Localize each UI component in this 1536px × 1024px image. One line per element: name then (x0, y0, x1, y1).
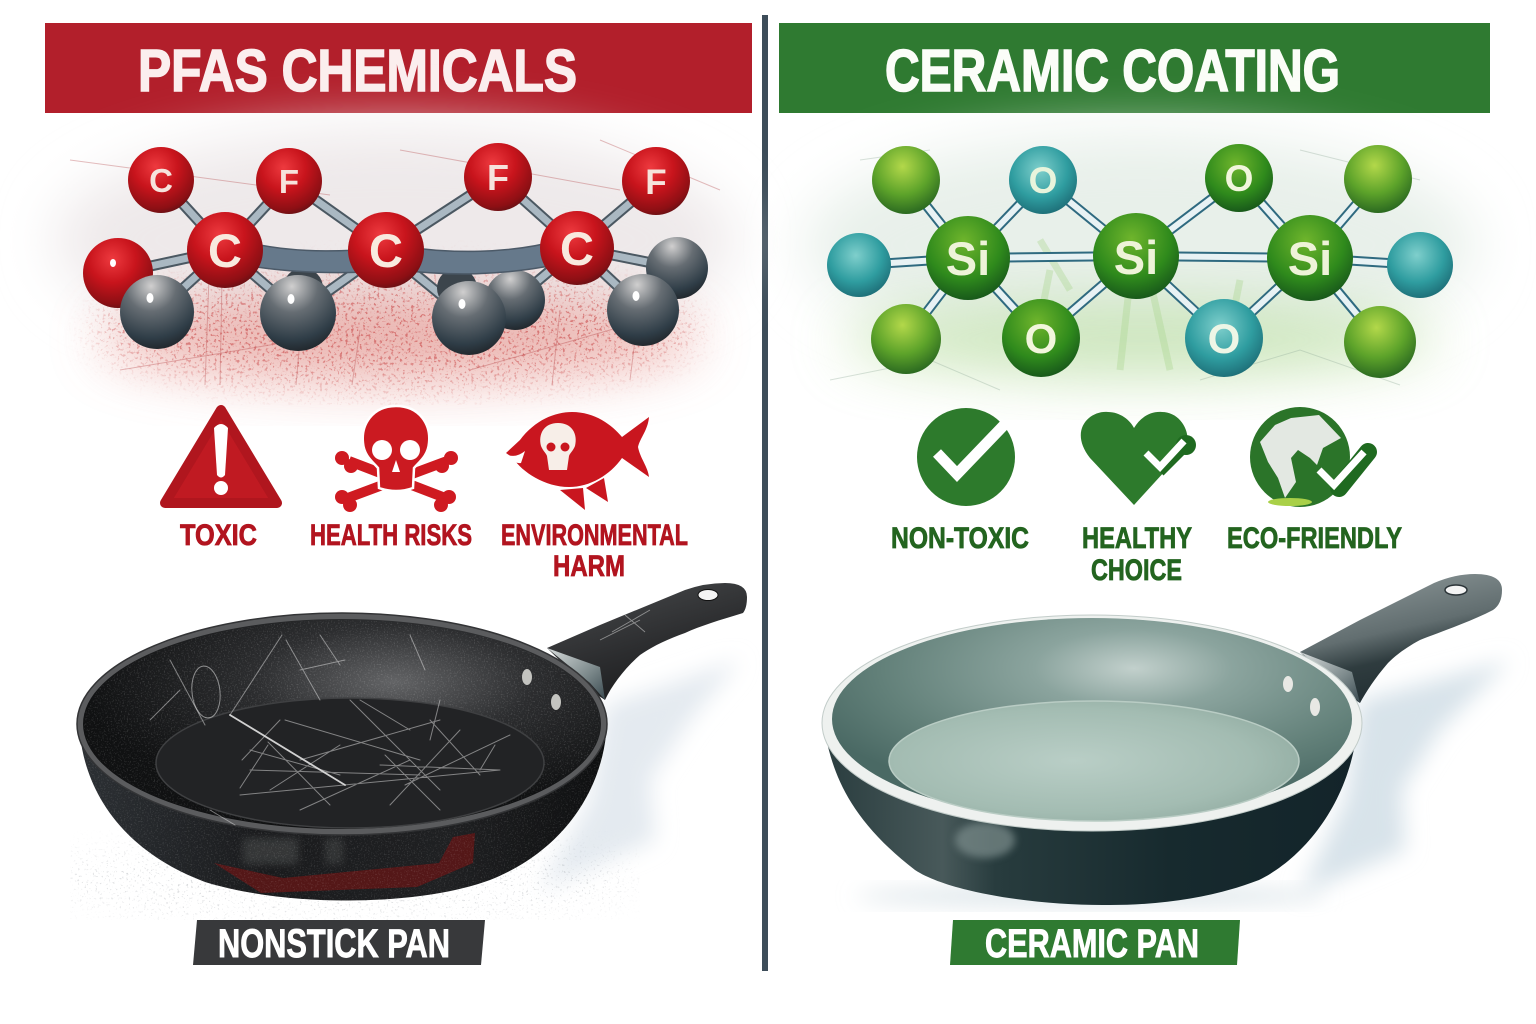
atom: O teal (1185, 299, 1263, 377)
atom: Si left (926, 216, 1010, 300)
pan floor (156, 698, 544, 828)
pan interior (83, 619, 601, 829)
atom: O teal: O (1208, 315, 1240, 362)
label: environmental harm (501, 519, 688, 583)
atoms behind chain (283, 237, 708, 330)
atom: C centre left: C (208, 224, 242, 277)
atom: O green: O (1025, 315, 1057, 362)
pan shadow (540, 660, 740, 890)
icon: heart with check (1081, 412, 1196, 505)
heading: PFAS chemicals (45, 23, 752, 113)
atom: lime (871, 304, 941, 374)
label: environmental harm: ENVIRONMENTAL (501, 519, 688, 552)
atom: grey (120, 275, 194, 349)
atom: grey (607, 274, 679, 346)
label: healthy choice: HEALTHY (1082, 522, 1192, 555)
atom: F (464, 143, 532, 211)
pan: scratched nonstick (70, 583, 747, 920)
atom: F: F (645, 163, 667, 202)
icon: warning triangle (165, 410, 277, 503)
icon: check circle (917, 408, 1015, 506)
atom: C (128, 147, 194, 213)
label: healthy choice: CHOICE (1091, 554, 1182, 587)
icon: globe with check (1250, 407, 1368, 507)
pan shadow (1300, 660, 1510, 895)
icon: skull and crossbones (335, 406, 458, 512)
icon: fish with skull (506, 412, 649, 510)
pan body gloss (955, 822, 1015, 858)
divider (762, 15, 768, 971)
heading: PFAS chemicals: PFAS CHEMICALS (138, 38, 577, 104)
label: non-toxic: NON-TOXIC (891, 522, 1029, 555)
bonds (118, 177, 677, 318)
bonds (859, 178, 1420, 342)
atom: O teal: O (1029, 160, 1057, 201)
atom: grey (260, 275, 336, 351)
atom: lime (872, 146, 940, 214)
atom: Si centre (1093, 213, 1179, 299)
label: ceramic pan: CERAMIC PAN (985, 922, 1199, 966)
backbone band (250, 240, 560, 274)
atom: C centre: C (369, 224, 403, 277)
atom: grey (432, 281, 506, 355)
atom: Si right: Si (1288, 232, 1332, 285)
pan rim (77, 613, 607, 835)
atom: O green (1205, 144, 1273, 212)
label: eco-friendly: ECO-FRIENDLY (1227, 522, 1402, 555)
atom: O green (1002, 299, 1080, 377)
pan body (80, 735, 606, 901)
label: health risks: HEALTH RISKS (310, 519, 472, 552)
atom: left red (83, 238, 153, 308)
molecule backdrop: red stain (55, 130, 740, 405)
pan interior texture (80, 615, 605, 830)
atom: F (256, 148, 322, 214)
atom: F (622, 147, 690, 215)
panel: ceramic coating (779, 23, 1510, 966)
molecule: PFAS chain (83, 143, 708, 355)
atom: O green: O (1225, 158, 1253, 199)
label: toxic: TOXIC (180, 519, 257, 552)
pan interior (832, 618, 1352, 820)
atom: teal left (827, 233, 891, 297)
atom: Si left: Si (946, 232, 990, 285)
atom: C centre right (540, 211, 614, 285)
atom: C centre left (187, 212, 263, 288)
pan rim (822, 615, 1362, 831)
pan handle (1300, 574, 1502, 703)
atom: Si right (1267, 215, 1353, 301)
atom: teal right (1387, 232, 1453, 298)
pan body reflection and stain (85, 741, 605, 900)
atom: F: F (487, 157, 509, 198)
floor dust (70, 830, 640, 920)
pan body (826, 738, 1356, 905)
label: nonstick pan: NONSTICK PAN (218, 922, 450, 966)
label: environmental harm: HARM (553, 550, 625, 583)
molecule: silica network (827, 144, 1453, 378)
pan floor (889, 701, 1299, 821)
atom: C: C (149, 162, 173, 199)
pan handle (547, 583, 747, 700)
pan rivets (522, 669, 561, 710)
atom: C centre right: C (560, 222, 594, 275)
pan rivets (1283, 676, 1320, 716)
molecule backdrop: green wash (805, 135, 1475, 390)
atom: O teal (1009, 146, 1077, 214)
atom: lime (1344, 145, 1412, 213)
heading: ceramic coating (779, 23, 1490, 113)
pan shadow low (855, 888, 1325, 904)
heading: ceramic coating: CERAMIC COATING (885, 38, 1340, 104)
label: healthy choice (1082, 522, 1192, 587)
panel: PFAS chemicals (45, 23, 752, 966)
pan scratches (150, 635, 510, 825)
atom: C centre (348, 212, 424, 288)
pan: ceramic (822, 574, 1510, 905)
atom: F: F (279, 163, 299, 200)
atom: lime (1344, 306, 1416, 378)
atom: Si centre: Si (1114, 231, 1158, 284)
